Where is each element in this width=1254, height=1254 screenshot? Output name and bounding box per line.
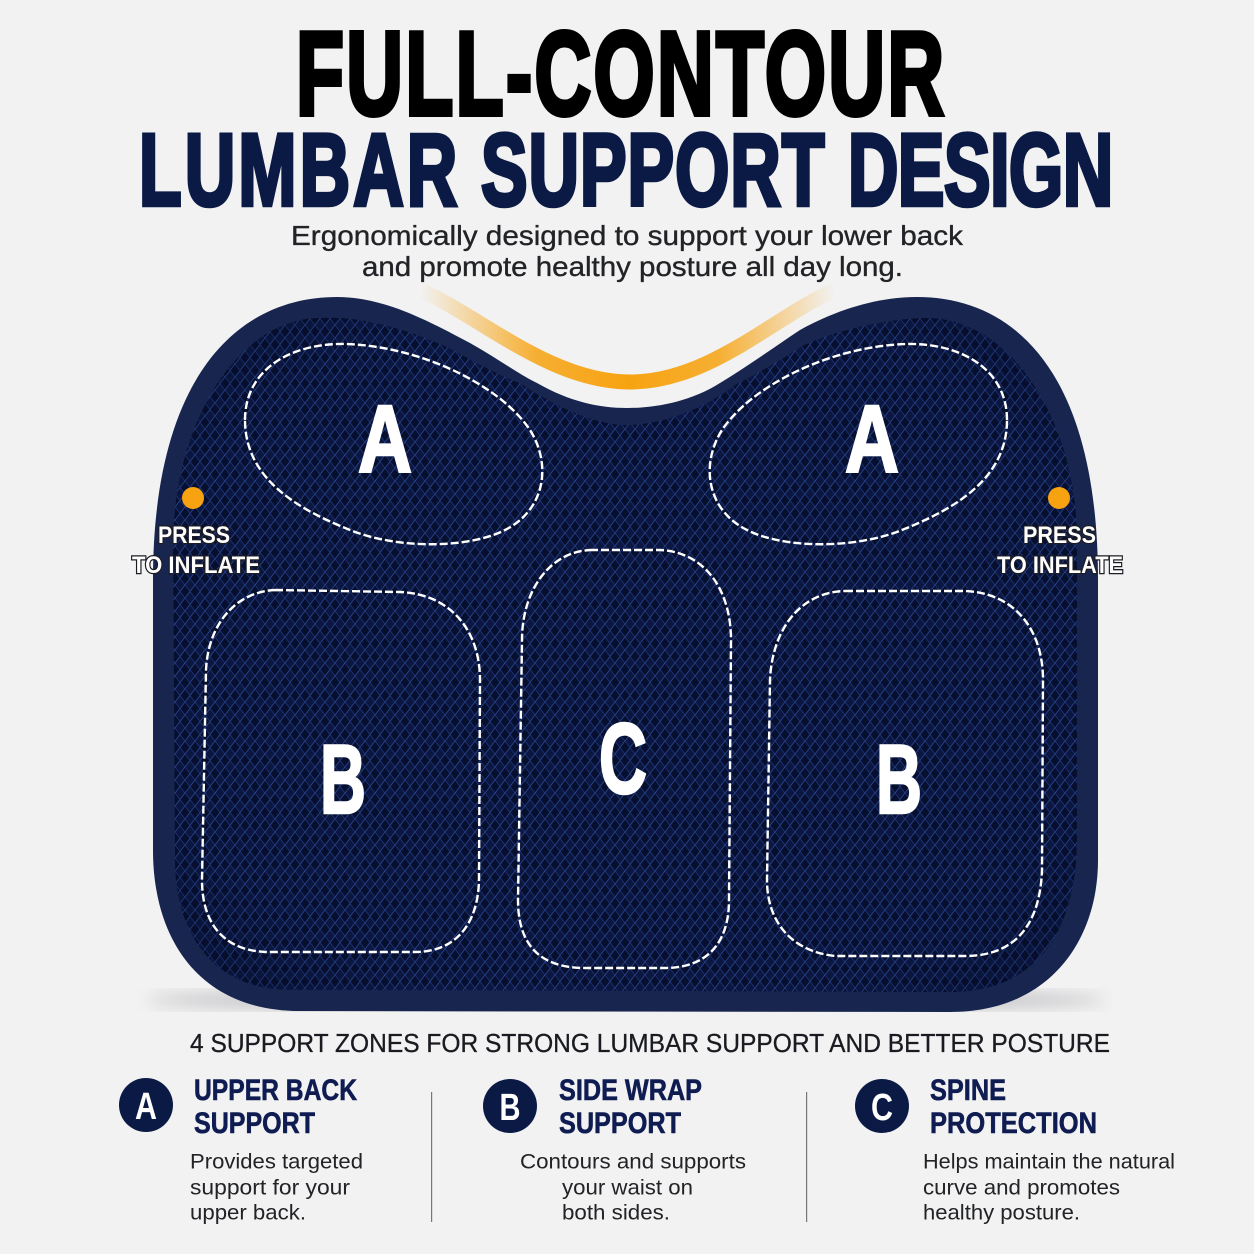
left inflate label: PRESS bbox=[158, 522, 230, 549]
arrow: orange contour curve bbox=[420, 290, 835, 382]
divider 1 bbox=[431, 1092, 432, 1222]
text C: healthy posture. bbox=[923, 1202, 1080, 1224]
subtitle bbox=[291, 220, 964, 282]
text A: Provides targeted bbox=[190, 1150, 363, 1174]
left inflate label: TO INFLATE bbox=[132, 552, 260, 579]
text B: Contours and supports bbox=[520, 1150, 746, 1174]
badge B bbox=[483, 1079, 537, 1133]
zone letters bbox=[320, 386, 922, 834]
right inflate label: TO INFLATE bbox=[997, 552, 1123, 579]
title: SUPPORT bbox=[481, 113, 824, 227]
text B: your waist on bbox=[562, 1176, 693, 1200]
heading A: UPPER BACK bbox=[194, 1074, 357, 1107]
left inflate label bbox=[132, 522, 260, 579]
zone B right outline bbox=[767, 591, 1043, 956]
title: LUMBAR bbox=[139, 113, 457, 227]
text A: upper back. bbox=[190, 1202, 306, 1224]
badge B: B bbox=[500, 1087, 520, 1129]
badge C: C bbox=[871, 1087, 893, 1129]
divider 2 bbox=[806, 1092, 807, 1222]
badge A bbox=[119, 1078, 173, 1132]
zone A left outline bbox=[245, 344, 542, 544]
zone B left outline bbox=[202, 590, 480, 952]
panel: legend C bbox=[855, 1074, 1175, 1224]
zone A right outline bbox=[710, 344, 1007, 544]
text C: Helps maintain the natural bbox=[923, 1150, 1175, 1174]
icon: left inflate dot bbox=[182, 487, 204, 509]
right inflate label: PRESS bbox=[1023, 522, 1096, 549]
cushion shadow bbox=[146, 990, 1106, 1010]
title bbox=[139, 8, 1113, 227]
zone letters: A bbox=[358, 386, 412, 493]
heading B: SUPPORT bbox=[559, 1107, 681, 1140]
zone letters: A bbox=[845, 386, 899, 493]
text A bbox=[190, 1150, 363, 1224]
panel: legend B bbox=[483, 1074, 746, 1224]
text C: curve and promotes bbox=[923, 1176, 1120, 1200]
zone C outline bbox=[518, 550, 731, 968]
panel: cushion bbox=[132, 297, 1123, 1012]
zone letters: C bbox=[599, 703, 647, 815]
subtitle: Ergonomically designed to support your lower back bbox=[291, 220, 964, 251]
text B: both sides. bbox=[562, 1202, 670, 1224]
panel: legend A bbox=[119, 1074, 363, 1224]
text C bbox=[923, 1150, 1175, 1224]
title: DESIGN bbox=[848, 113, 1113, 227]
text B bbox=[520, 1150, 746, 1224]
icon: right inflate dot bbox=[1048, 487, 1070, 509]
subtitle: and promote healthy posture all day long. bbox=[362, 251, 903, 282]
heading C bbox=[930, 1074, 1097, 1140]
heading A bbox=[194, 1074, 357, 1140]
text A: support for your bbox=[190, 1176, 350, 1200]
support zones heading: 4 SUPPORT ZONES FOR STRONG LUMBAR SUPPORT AND BETTER POSTURE bbox=[190, 1028, 1110, 1058]
heading C: SPINE bbox=[930, 1074, 1006, 1107]
heading C: PROTECTION bbox=[930, 1107, 1097, 1140]
zone letters: B bbox=[320, 724, 366, 834]
badge A: A bbox=[135, 1086, 157, 1128]
heading A: SUPPORT bbox=[194, 1107, 315, 1140]
right inflate label bbox=[997, 522, 1123, 579]
heading B bbox=[559, 1074, 702, 1140]
title: FULL-CONTOUR bbox=[296, 8, 944, 140]
heading B: SIDE WRAP bbox=[559, 1074, 702, 1107]
zone letters: B bbox=[876, 724, 922, 834]
badge C bbox=[855, 1079, 909, 1133]
